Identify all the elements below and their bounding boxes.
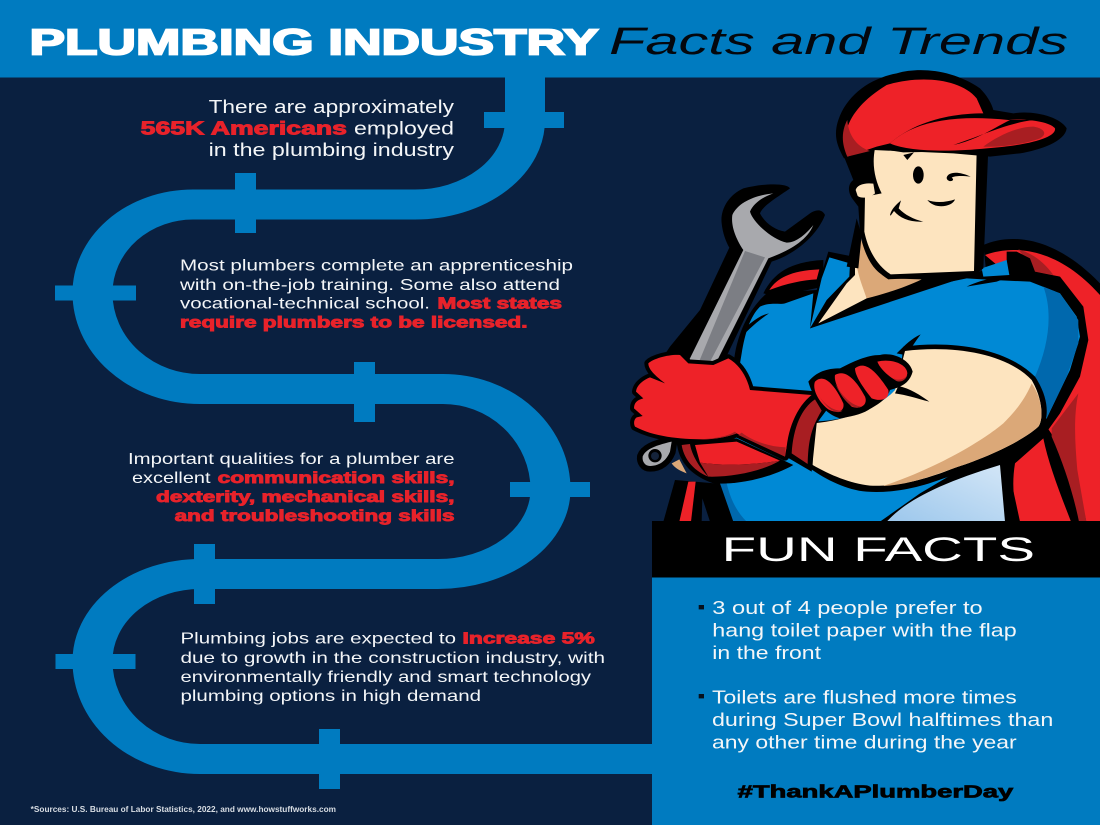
cape	[983, 239, 1100, 523]
fun fact: super bowl: Toilets are flushed more times	[712, 687, 1017, 707]
text block: job growth: environmentally friendly and smart technology	[180, 669, 591, 686]
text block: qualities: excellent	[132, 470, 211, 487]
text block: qualities: dexterity, mechanical skills,	[156, 489, 454, 506]
smile	[890, 200, 923, 222]
lower hand	[677, 438, 793, 484]
title: PLUMBING INDUSTRY	[30, 21, 598, 62]
winking eye	[947, 173, 971, 181]
text block: job growth: Plumbing jobs are expected to	[180, 631, 456, 648]
head	[843, 147, 988, 279]
wrench ring	[643, 442, 687, 473]
title: Facts and Trends	[609, 21, 1068, 63]
shirt	[708, 252, 1088, 522]
text block: qualities: and troubleshooting skills	[175, 508, 455, 525]
fun fact: toilet paper: 3 out of 4 people prefer to	[712, 598, 983, 618]
forearm	[810, 344, 1047, 492]
text block: employment	[141, 97, 454, 160]
text block: employment: There are approximately	[209, 97, 454, 117]
text block: job growth: Increase 5%	[462, 631, 595, 648]
text block: qualities: communication skills,	[218, 470, 454, 487]
fun facts heading: FUN FACTS	[722, 531, 1035, 569]
sources footnote: *Sources: U.S. Bureau of Labor Statistics, 2022, and www.howstuffworks.com	[31, 805, 336, 814]
shirt shadow	[1035, 287, 1078, 418]
pipeline	[55, 75, 660, 789]
title	[30, 21, 1068, 63]
cap	[836, 70, 1067, 158]
ear	[856, 183, 875, 198]
eye	[913, 166, 924, 184]
text block: employment: in the plumbing industry	[209, 140, 454, 160]
text block: job growth: plumbing options in high demand	[180, 688, 481, 705]
text block: training	[179, 258, 573, 332]
fun fact: super bowl	[699, 687, 1053, 752]
fun fact: toilet paper: in the front	[712, 643, 821, 663]
pale highlight	[887, 465, 1005, 522]
text block: qualities: Important qualities for a plumber are	[128, 451, 455, 468]
text block: training: vocational-technical school.	[180, 296, 430, 313]
folded fingers	[808, 354, 913, 418]
fun fact: super bowl: during Super Bowl halftimes than	[712, 710, 1053, 730]
glove cuff	[786, 395, 827, 472]
fun fact: toilet paper: hang toilet paper with the flap	[712, 621, 1017, 641]
plumber mascot	[634, 70, 1100, 523]
hashtag: #ThankAPlumberDay	[738, 781, 1014, 801]
neck and collar	[810, 232, 1009, 328]
header band	[0, 0, 1100, 78]
text block: qualities	[128, 451, 455, 525]
text block: job growth	[180, 631, 605, 705]
fun fact: toilet paper	[699, 598, 1017, 663]
text block: employment: 565K Americans	[141, 118, 347, 138]
fun facts heading bar	[652, 521, 1100, 578]
text block: employment: employed	[354, 118, 454, 138]
shirt creases	[745, 277, 1010, 355]
gripping glove	[634, 355, 812, 457]
text block: training: Most states	[438, 296, 562, 313]
text block: job growth: due to growth in the construction industry, with	[180, 650, 605, 667]
lower body stripes	[663, 480, 728, 522]
shoulder cape	[763, 260, 823, 297]
text block: training: Most plumbers complete an apprenticeship	[180, 258, 573, 275]
fun fact: super bowl: any other time during the year	[712, 732, 1017, 752]
text block: training: with on-the-job training. Some also attend	[179, 277, 560, 294]
fun facts panel	[652, 521, 1100, 825]
text block: training: require plumbers to be licensed.	[180, 315, 528, 332]
wrench	[663, 184, 825, 370]
